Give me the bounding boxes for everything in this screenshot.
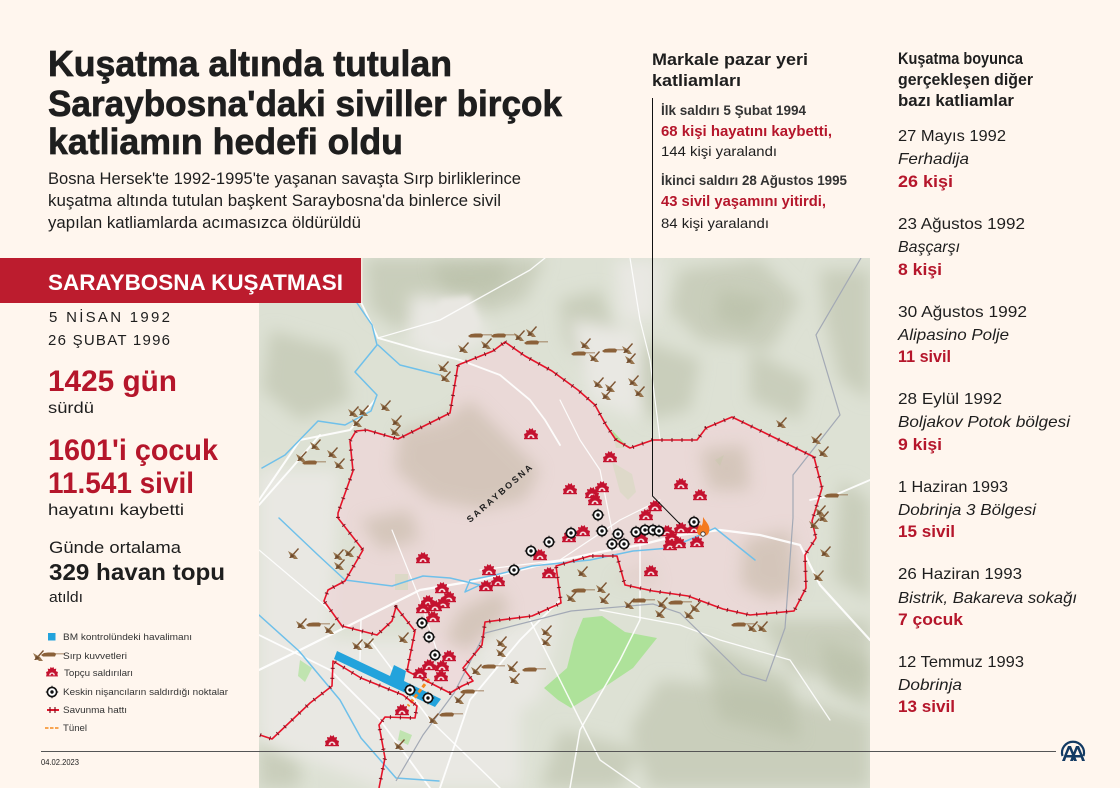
callout line to Markale: [652, 258, 680, 524]
item: Başçarşı: 8 kişi: [898, 260, 942, 279]
item: Dobrinja: [898, 654, 1024, 716]
item: Dobrinja 3: 1 Haziran 1993: [898, 479, 1008, 496]
item: Ferhadija: 27 Mayıs 1992: [898, 128, 1006, 145]
panel: other massacres: [897, 50, 1077, 716]
map roads: [259, 258, 870, 788]
second attack: İkinci saldırı 28 Ağustos 1995: [661, 173, 847, 188]
title: Saraybosna'daki siviller birçok: [48, 83, 563, 124]
legend: defence line: Savunma hattı: [63, 705, 127, 716]
item: Boljakov Potok: Boljakov Potok bölgesi: [898, 414, 1070, 431]
second attack: 84 kişi yaralandı: [661, 215, 769, 231]
item: Dobrinja 3: Dobrinja 3 Bölgesi: [898, 502, 1036, 519]
dates: 5 NİSAN 1992: [49, 308, 170, 326]
item: Ferhadija: 26 kişi: [898, 172, 953, 191]
map parks: [298, 430, 724, 745]
first attack: 144 kişi yaralandı: [661, 143, 777, 159]
item: Boljakov Potok: 9 kişi: [898, 435, 942, 454]
stat: duration: [48, 365, 177, 417]
item: Dobrinja: 12 Temmuz 1993: [898, 654, 1024, 671]
legend: tunnel: [45, 723, 87, 734]
stat: mortar shells: [49, 538, 225, 606]
map highway: [396, 258, 861, 781]
callout line upper: [652, 98, 653, 258]
item: Başçarşı: [898, 216, 1025, 279]
heading: bazı katliamlar: [898, 92, 1015, 110]
item: Bistrik: 7 çocuk: [898, 610, 964, 629]
subtitle: [48, 170, 521, 232]
map pink terrain: [360, 400, 800, 650]
heading: [652, 51, 808, 90]
stat: casualties: [48, 434, 218, 519]
item: Boljakov Potok: 28 Eylül 1992: [898, 391, 1002, 408]
legend: Serb forces: [33, 650, 127, 662]
item: Alipasino Polje: [897, 304, 1027, 366]
stat: casualties: 1601'i çocuk: [48, 434, 218, 467]
stat: mortar shells: Günde ortalama: [49, 538, 182, 557]
second attack: 43 sivil yaşamını yitirdi,: [661, 194, 826, 210]
item: Ferhadija: Ferhadija: [898, 151, 969, 168]
stat: duration: 1425 gün: [48, 365, 177, 398]
subtitle: Bosna Hersek'te 1992-1995'te yaşanan savaşta Sırp birliklerince: [48, 170, 521, 188]
dates: [48, 308, 170, 349]
item: Dobrinja 3: [898, 479, 1036, 541]
heading: katliamları: [652, 72, 741, 90]
urban west plain: [259, 260, 660, 788]
heading: Markale pazar yeri: [652, 51, 808, 69]
stat: casualties: 11.541 sivil: [48, 467, 194, 500]
icon: fire at Markale: [697, 517, 709, 536]
title: katliamın hedefi oldu: [48, 121, 403, 162]
item: Dobrinja: 13 sivil: [898, 697, 955, 716]
sniper points: [404, 509, 700, 704]
airport: [334, 651, 441, 707]
second attack: [661, 173, 847, 231]
legend: Serb forces: Sırp kuvvetleri: [63, 651, 127, 662]
heading: gerçekleşen diğer: [898, 71, 1034, 89]
item: Bistrik: [898, 566, 1077, 629]
heading: Kuşatma boyunca: [898, 50, 1024, 68]
item: Başçarşı: 23 Ağustos 1992: [898, 216, 1025, 233]
banner: [0, 258, 362, 303]
dates: 26 ŞUBAT 1996: [48, 332, 170, 349]
artillery: [288, 326, 831, 750]
map label: Saraybosna: SARAYBOSNA: [465, 461, 536, 525]
tanks: [302, 334, 848, 716]
item: Alipasino Polje: 11 sivil: [898, 347, 951, 366]
first attack: [661, 103, 832, 159]
legend: [33, 632, 228, 734]
item: Boljakov Potok: [898, 391, 1070, 454]
heading: [898, 50, 1034, 110]
map: [259, 258, 870, 788]
logo: [1062, 742, 1085, 761]
item: Ferhadija: [898, 128, 1006, 191]
title: [48, 43, 563, 162]
legend: sniper points: Keskin nişancıların saldırdığı noktalar: [63, 687, 228, 698]
banner: SARAYBOSNA KUŞATMASI: [48, 270, 343, 295]
stat: mortar shells: 329 havan topu: [49, 559, 225, 585]
footer rule: [41, 751, 1056, 752]
first attack: İlk saldırı 5 Şubat 1994: [661, 103, 806, 118]
item: Bistrik: Bistrik, Bakareva sokağı: [898, 590, 1077, 607]
first attack: 68 kişi hayatını kaybetti,: [661, 124, 832, 140]
map pink area: [324, 342, 822, 693]
title: Kuşatma altında tutulan: [48, 43, 452, 84]
item: Dobrinja 3: 15 sivil: [898, 522, 955, 541]
item: Alipasino Polje: Alipasino Polje: [897, 327, 1009, 344]
stat: duration: sürdü: [48, 400, 94, 417]
legend: artillery strikes: Topçu saldırıları: [64, 668, 133, 679]
artillery strikes: [325, 428, 707, 746]
item: Başçarşı: Başçarşı: [898, 239, 960, 256]
tunnel: [408, 679, 429, 706]
map terrain: [259, 258, 870, 788]
subtitle: yapılan katliamlarda acımasızca öldürüldü: [48, 214, 361, 232]
panel: Markale massacres: [652, 51, 847, 258]
item: Dobrinja: Dobrinja: [898, 677, 962, 694]
stat: mortar shells: atıldı: [49, 589, 83, 606]
stat: casualties: hayatını kaybetti: [48, 502, 184, 519]
item: Alipasino Polje: 30 Ağustos 1992: [898, 304, 1027, 321]
date: 04.02.2023: [41, 758, 80, 767]
subtitle: kuşatma altında tutulan başkent Saraybosna'da binlerce sivil: [48, 192, 501, 210]
map rivers: [259, 303, 755, 781]
item: Bistrik: 26 Haziran 1993: [898, 566, 1022, 583]
panel: siege stats: [48, 308, 225, 606]
legend: airport: BM kontrolündeki havalimanı: [63, 632, 192, 643]
defence line: [260, 342, 822, 788]
legend: tunnel: Tünel: [63, 723, 87, 734]
